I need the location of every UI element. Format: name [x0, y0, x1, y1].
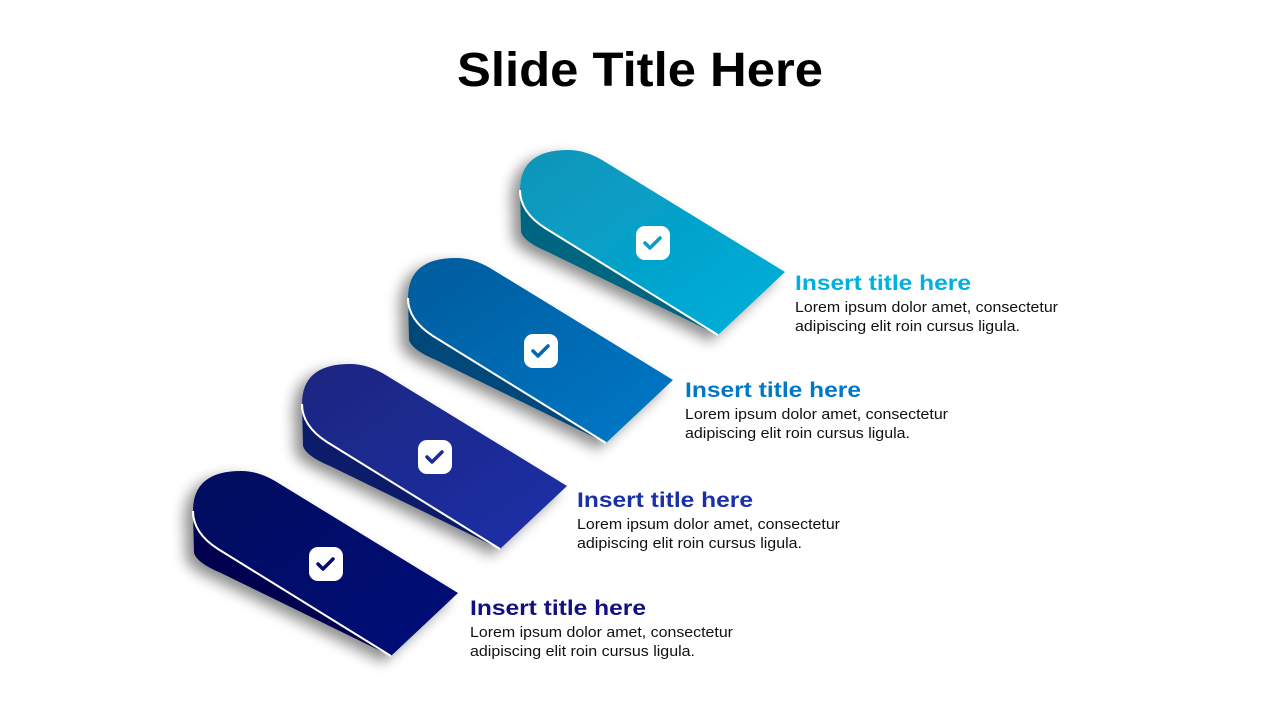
icon: check — [309, 547, 343, 581]
icon: check — [524, 334, 558, 368]
step 4 shape — [193, 471, 458, 656]
text block 1 — [795, 272, 1058, 335]
step 1 shape — [520, 150, 785, 335]
text block 1: adipiscing elit roin cursus ligula. — [795, 318, 1020, 335]
text block 2: adipiscing elit roin cursus ligula. — [685, 425, 910, 442]
title: Slide Title Here — [457, 44, 823, 97]
text block 4 — [470, 597, 733, 660]
text block 1: Lorem ipsum dolor amet, consectetur — [795, 299, 1058, 316]
text block 3: Lorem ipsum dolor amet, consectetur — [577, 516, 840, 533]
text block 2: Lorem ipsum dolor amet, consectetur — [685, 406, 948, 423]
text block 3 — [577, 489, 840, 552]
text block 4: Lorem ipsum dolor amet, consectetur — [470, 624, 733, 641]
step 2 shape — [408, 258, 673, 443]
icon: check — [636, 226, 670, 260]
text block 3: adipiscing elit roin cursus ligula. — [577, 535, 802, 552]
icon: check — [418, 440, 452, 474]
text block 4: adipiscing elit roin cursus ligula. — [470, 643, 695, 660]
text block 4: Insert title here — [470, 597, 646, 620]
text block 2 — [685, 379, 948, 442]
text block 3: Insert title here — [577, 489, 753, 512]
step 3 shape — [302, 364, 567, 549]
text block 1: Insert title here — [795, 272, 971, 295]
text block 2: Insert title here — [685, 379, 861, 402]
